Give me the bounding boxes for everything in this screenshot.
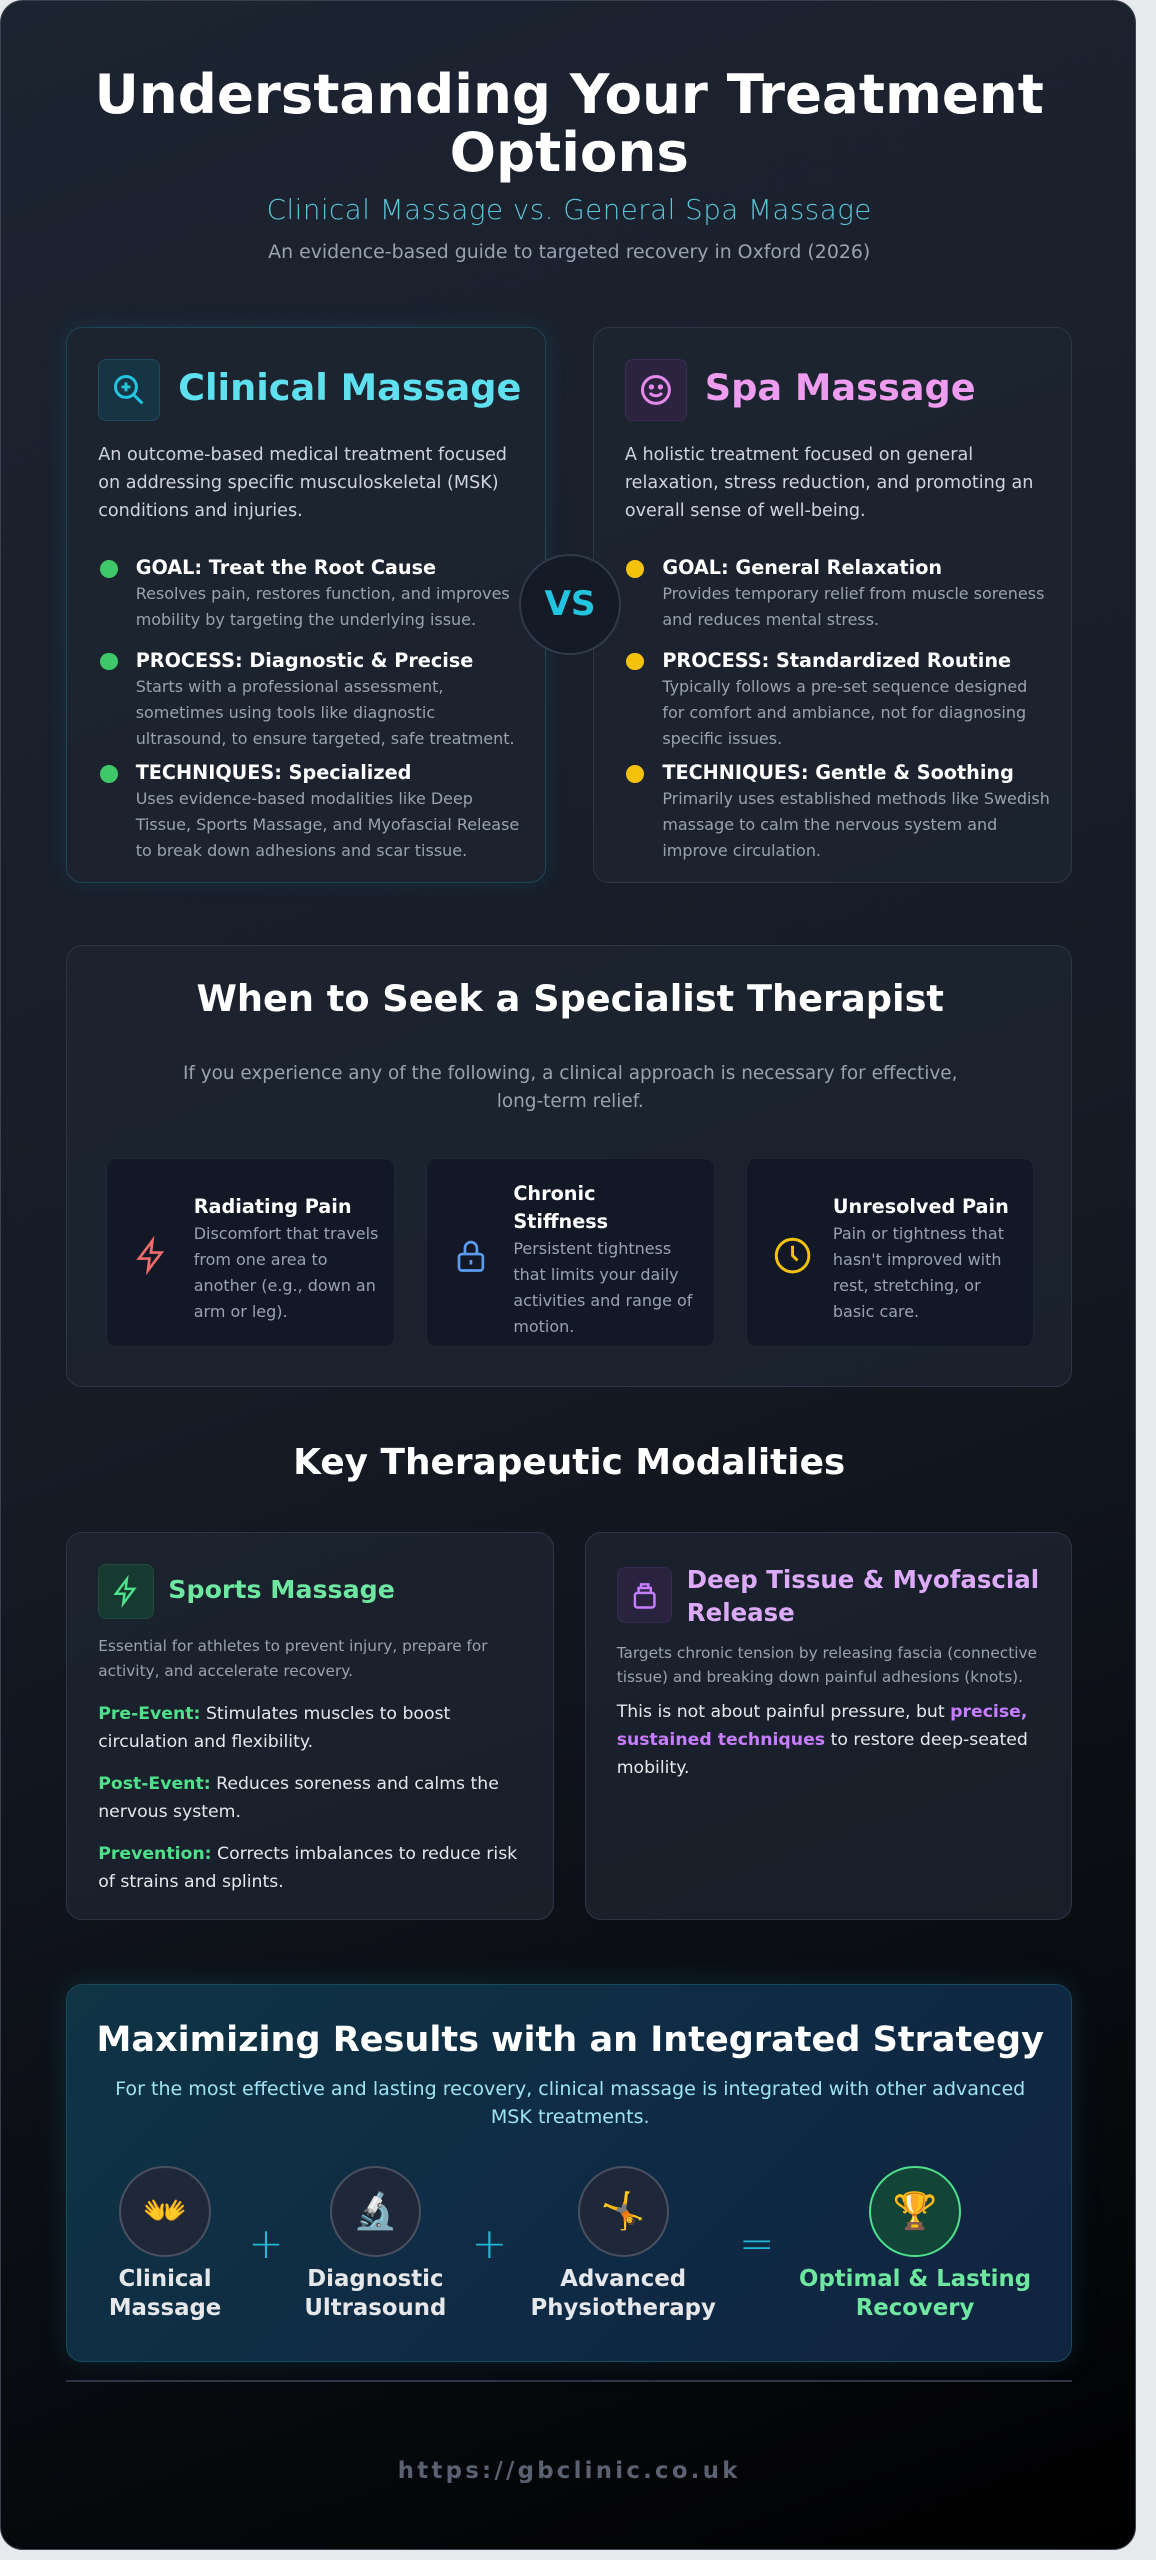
step: clinical massage: Clinical [118, 2266, 212, 2292]
item: goal: GOAL: Treat the Root Cause [136, 556, 436, 579]
panel: integrated strategy: 🏆 [893, 2191, 937, 2232]
tagline: An evidence-based guide to targeted recovery in Oxford (2026) [268, 241, 870, 263]
card: radiating pain: Radiating Pain [194, 1195, 352, 1218]
operator: plus: + [472, 2219, 507, 2268]
card: chronic stiffness [426, 1158, 715, 1347]
card: chronic stiffness: Persistent tightness that limits your daily activities and range of motion. [513, 1239, 692, 1336]
description: An outcome-based medical treatment focused on addressing specific musculoskeletal (MSK) conditions and injuries. [98, 445, 507, 521]
heading: key therapeutic modalities: Key Therapeutic Modalities [293, 1442, 845, 1483]
item: process [626, 649, 1027, 748]
icon: smiley [625, 359, 687, 421]
list [98, 1704, 517, 1892]
operator: equals: = [739, 2219, 774, 2268]
panel: sports massage [66, 1532, 554, 1920]
item: techniques: TECHNIQUES: Specialized [136, 761, 411, 784]
list: Post-Event: Reduces soreness and calms the nervous system. [98, 1774, 499, 1822]
title: Options [450, 120, 689, 184]
panel: integrated strategy: Ultrasound [304, 2295, 446, 2321]
heading: Maximizing Results with an Integrated Strategy [96, 2019, 1044, 2060]
heading: Sports Massage [168, 1575, 395, 1604]
item: techniques [100, 761, 519, 860]
item: techniques: Primarily uses established methods like Swedish massage to calm the nervous system and improve circulation. [662, 789, 1050, 860]
item: goal [100, 556, 510, 629]
list: Pre-Event: Stimulates muscles to boost circulation and flexibility. [98, 1704, 450, 1752]
card: radiating pain: Discomfort that travels from one area to another (e.g., down an arm or leg). [194, 1224, 378, 1321]
card: chronic stiffness: Chronic [513, 1182, 595, 1205]
item: goal: GOAL: General Relaxation [662, 556, 942, 579]
card: unresolved pain [746, 1158, 1034, 1347]
item: techniques: TECHNIQUES: Gentle & Soothing [662, 761, 1014, 784]
intro: For the most effective and lasting recovery, clinical massage is integrated with other advanced MSK treatments. [115, 2078, 1025, 2128]
panel: integrated strategy: 🔬 [353, 2191, 398, 2232]
panel: integrated strategy: Diagnostic [307, 2266, 443, 2292]
heading: spa: Spa Massage [705, 366, 976, 409]
item: process: Typically follows a pre-set sequence designed for comfort and ambiance, not for diagnosing specific issues. [662, 677, 1027, 748]
icon: bolt [98, 1564, 154, 1619]
vs badge: VS [544, 584, 596, 624]
item: techniques [626, 761, 1050, 860]
item: process: PROCESS: Standardized Routine [662, 649, 1011, 672]
description: Targets chronic tension by releasing fascia (connective tissue) and breaking down painful adhesions (knots). [617, 1644, 1037, 1686]
panel: spa massage [593, 327, 1072, 883]
step: clinical massage: 👐 [143, 2191, 187, 2232]
intro text: If you experience any of the following, a clinical approach is necessary for effective, long-term relief. [183, 1063, 957, 1112]
icon: jar [617, 1567, 672, 1623]
panel: integrated strategy: Recovery [856, 2295, 974, 2321]
step: clinical massage [109, 2166, 221, 2321]
panel: integrated strategy: Physiotherapy [531, 2295, 716, 2321]
heading: When to Seek a Specialist Therapist [196, 977, 944, 1020]
title [95, 62, 1044, 184]
footer url: https://gbclinic.co.uk [398, 2458, 741, 2484]
item: goal: Resolves pain, restores function, and improves mobility by targeting the underlying issue. [136, 584, 510, 629]
item: goal [626, 556, 1044, 629]
operator: plus: + [248, 2219, 284, 2268]
panel: integrated strategy: Optimal & Lasting [799, 2266, 1031, 2292]
card: unresolved pain: Pain or tightness that hasn't improved with rest, stretching, or basic care. [833, 1224, 1004, 1321]
panel: deep tissue [585, 1532, 1072, 1920]
panel: integrated strategy: Advanced [560, 2266, 686, 2292]
panel: integrated strategy: 🤸 [601, 2191, 646, 2232]
item: process: PROCESS: Diagnostic & Precise [136, 649, 473, 672]
step: advanced physiotherapy [531, 2166, 716, 2321]
heading: Deep Tissue & Myofascial Release [687, 1565, 1039, 1627]
list: Prevention: Corrects imbalances to reduce risk of strains and splints. [98, 1844, 517, 1892]
subtitle: Clinical Massage vs. General Spa Massage [267, 193, 872, 226]
card: radiating pain [106, 1158, 395, 1347]
title: Understanding Your Treatment [95, 62, 1044, 126]
emphasis text: This is not about painful pressure, but precise, sustained techniques to restore deep-seated mobility. [617, 1702, 1028, 1778]
card: unresolved pain: Unresolved Pain [833, 1195, 1009, 1218]
description: Essential for athletes to prevent injury, prepare for activity, and accelerate recovery. [98, 1637, 488, 1680]
item: goal: Provides temporary relief from muscle soreness and reduces mental stress. [662, 584, 1044, 629]
heading: clinical: Clinical Massage [178, 366, 521, 409]
panel: clinical massage [66, 327, 546, 883]
panel: when to seek a specialist [66, 945, 1072, 1387]
panel: integrated strategy [66, 1984, 1072, 2362]
item: process: Starts with a professional assessment, sometimes using tools like diagnostic ultrasound, to ensure targeted, safe treatment. [136, 677, 515, 748]
step: diagnostic ultrasound [304, 2166, 896, 2321]
step: optimal recovery [799, 2166, 1031, 2321]
icon: magnifier [98, 359, 160, 421]
vs badge [519, 554, 621, 655]
item: techniques: Uses evidence-based modalities like Deep Tissue, Sports Massage, and Myofascial Release to break down adhesions and scar tissue. [136, 789, 519, 860]
description: A holistic treatment focused on general relaxation, stress reduction, and promoting an overall sense of well-being. [625, 445, 1033, 521]
card: chronic stiffness: Stiffness [513, 1210, 608, 1233]
item: process [100, 649, 515, 748]
step: clinical massage: Massage [109, 2295, 221, 2321]
